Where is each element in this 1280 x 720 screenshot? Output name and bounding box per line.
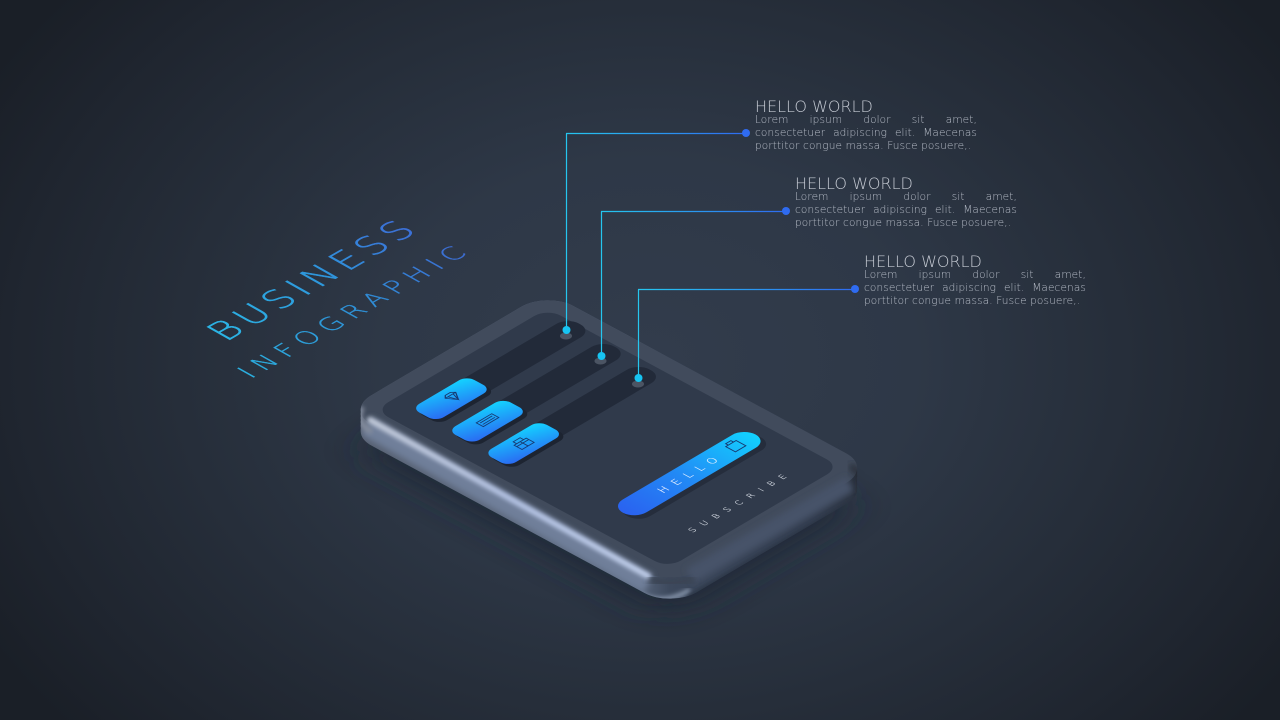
text block 3: Lorem ipsum dolor sit amet, [864,269,1086,281]
button label: HELLO [654,456,722,495]
button [484,421,564,466]
text block 2 [795,174,1017,229]
text block 2: consectetuer adipiscing elit. Maecenas [795,204,1017,216]
subheading: infographic: INFOGRAPHIC [231,243,474,382]
connector 2 [594,207,790,364]
button [448,398,527,444]
button body [611,428,767,519]
text block 1: consectetuer adipiscing elit. Maecenas [755,127,977,139]
title: business infographic [198,216,474,382]
right rim shading [650,466,864,598]
text block 3 [864,252,1086,307]
connector 3 [632,285,859,388]
icon: diamond [443,391,464,403]
text block 3: HELLO WORLD [864,252,982,271]
text block 2: porttitor congue massa. Fusce posuere,. [795,217,1011,229]
icon: keyboard [476,414,499,427]
leader line [566,134,568,330]
text block 3: consectetuer adipiscing elit. Maecenas [864,282,1086,294]
icon: bag [723,439,746,452]
text block 2: Lorem ipsum dolor sit amet, [795,191,1017,203]
button [412,376,491,422]
plate inner face [375,308,840,568]
pin dot [634,374,642,382]
hello button [610,428,773,523]
track [412,317,592,422]
sliders and controls in plate space [406,317,826,552]
end dot [782,207,790,215]
front rim highlight [360,407,690,599]
text block 2: HELLO WORLD [795,174,913,193]
text block 1: HELLO WORLD [755,97,873,116]
icon: gift box [511,436,534,449]
heading: business: BUSINESS [198,216,425,346]
slider 2 [447,340,631,447]
leader line [600,212,602,356]
track [449,340,627,445]
track [485,363,663,467]
text block 1: porttitor congue massa. Fusce posuere,. [755,140,971,152]
button shadow [616,431,773,523]
text block 3: porttitor congue massa. Fusce posuere,. [864,295,1080,307]
slider 3 [483,363,666,469]
end dot [851,285,859,293]
subscribe label: SUBSCRIBE [686,474,790,534]
pin base [632,380,644,388]
connector 1 [560,129,750,340]
pin dot [598,352,606,360]
text block 1: Lorem ipsum dolor sit amet, [755,114,977,126]
button shadow [451,401,532,447]
plate top lip [345,292,872,586]
isometric device plate [360,300,857,599]
end dot [742,129,750,137]
plate side wall [360,300,838,598]
leader line [638,290,640,378]
slider 1 [411,317,596,425]
ground shadow [358,339,858,618]
pin dot [562,326,570,334]
text block 1 [755,97,977,152]
pin base [560,332,572,340]
rim lighting [360,407,864,599]
button shadow [487,423,568,469]
button shadow [415,378,496,425]
pin base [594,358,606,364]
